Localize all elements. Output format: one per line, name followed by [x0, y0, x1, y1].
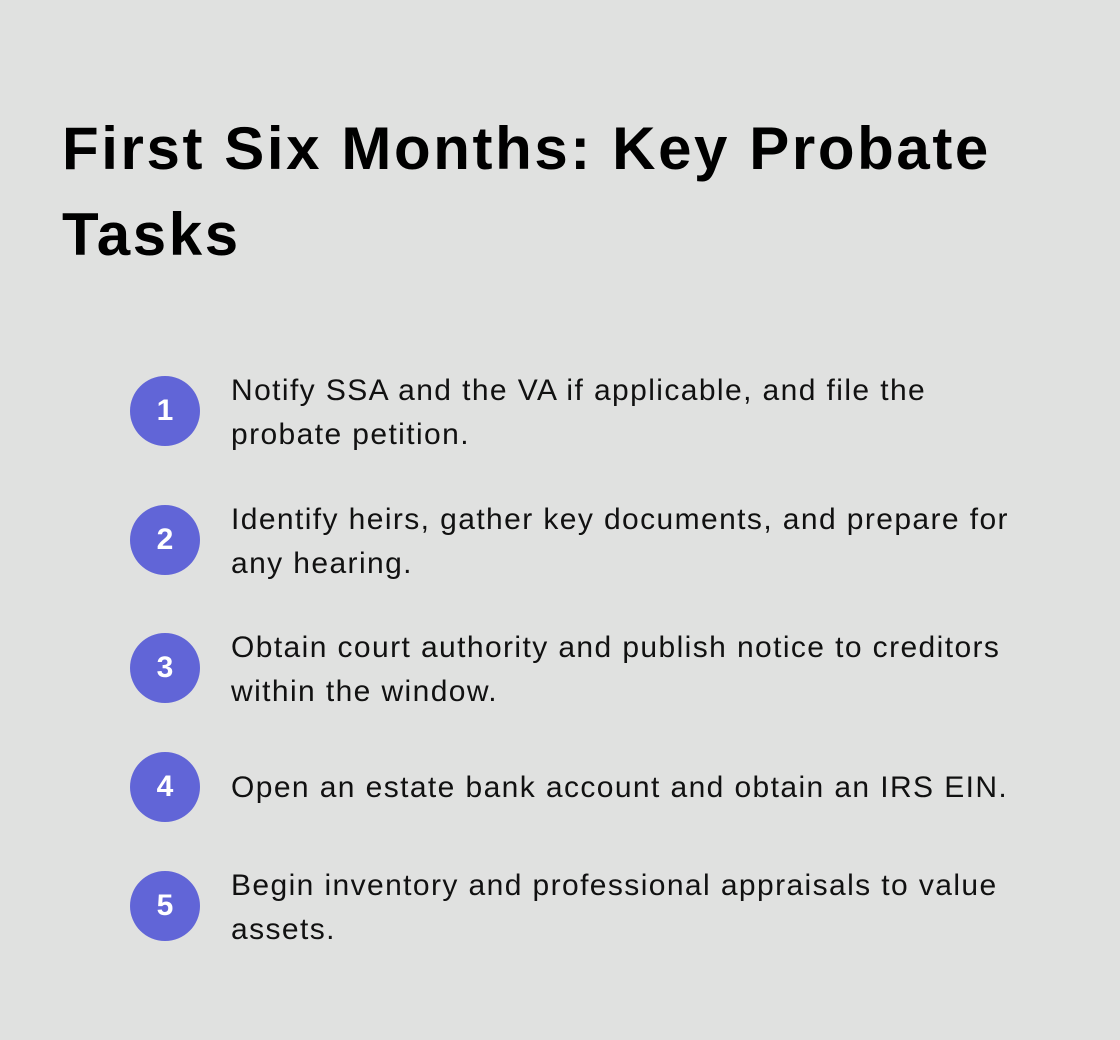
text 2: Identify heirs, gather key documents, and prepare for	[231, 503, 1009, 536]
badge 2: 2	[157, 523, 173, 556]
badge 2	[130, 505, 200, 575]
item 5	[130, 869, 998, 946]
text 2: any hearing.	[231, 547, 413, 580]
text 1: Notify SSA and the VA if applicable, and file the	[231, 374, 926, 407]
text 5: assets.	[231, 913, 336, 946]
badge 4	[130, 752, 200, 822]
item 4	[130, 752, 1008, 822]
text 3	[231, 631, 1000, 708]
badge 1: 1	[157, 394, 173, 427]
title: First Six Months: Key Probate	[62, 115, 991, 182]
text 4: Open an estate bank account and obtain an IRS EIN.	[231, 771, 1008, 804]
badge 5	[130, 871, 200, 941]
badge 3: 3	[157, 651, 173, 684]
text 3: within the window.	[231, 675, 498, 708]
text 5	[231, 869, 998, 946]
badge 3	[130, 633, 200, 703]
item 2	[130, 503, 1009, 580]
title: Tasks	[62, 201, 241, 268]
badge 5: 5	[157, 889, 173, 922]
text 1	[231, 374, 926, 451]
text 3: Obtain court authority and publish notice to creditors	[231, 631, 1000, 664]
text 1: probate petition.	[231, 418, 470, 451]
item 3	[130, 631, 1000, 708]
text 5: Begin inventory and professional appraisals to value	[231, 869, 998, 902]
title	[62, 115, 991, 268]
badge 1	[130, 376, 200, 446]
item 1	[130, 374, 926, 451]
text 2	[231, 503, 1009, 580]
badge 4: 4	[157, 770, 173, 803]
